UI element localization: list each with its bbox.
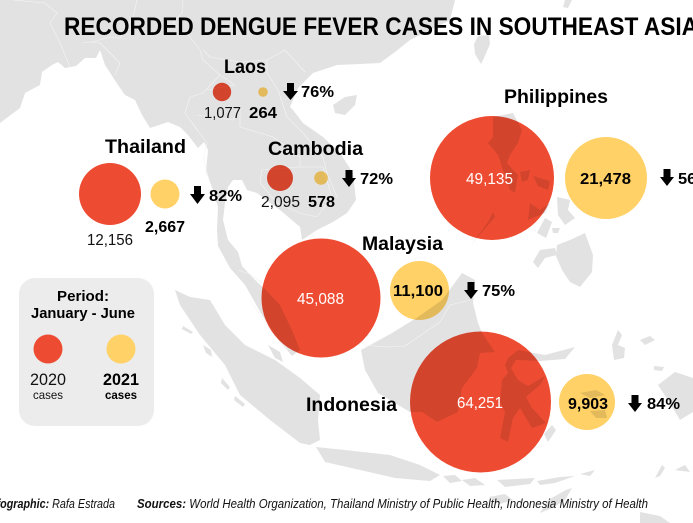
country: Thailand: 2,667 (145, 219, 185, 236)
panel: legend: 2021 (103, 371, 139, 389)
country: Malaysia: Malaysia (362, 233, 443, 255)
country: Thailand: 12,156 (87, 232, 133, 249)
country: Malaysia: 45,088 (297, 291, 344, 308)
panel: legend: cases (33, 388, 63, 402)
country: Philippines: 21,478 (580, 171, 631, 188)
country: Indonesia (306, 332, 680, 472)
country: Cambodia: 2,095 (261, 194, 300, 211)
country: Laos (204, 56, 334, 122)
country: Philippines: Philippines (504, 86, 608, 108)
country: Malaysia: 75% (482, 283, 515, 300)
country: Indonesia: Indonesia (306, 394, 397, 416)
panel: legend: cases (105, 388, 137, 402)
country: Thailand: Thailand (105, 136, 186, 158)
country: Philippines: 49,135 (466, 171, 513, 188)
footer credits: Sources: World Health Organization, Thailand Ministry of Public Health, Indonesia Ministry of Health (137, 497, 648, 511)
panel: legend (19, 278, 154, 426)
country: Thailand (79, 136, 242, 249)
country: Laos: Laos (224, 56, 266, 78)
country: Laos: 1,077 (204, 105, 241, 122)
country: Laos: 264 (249, 105, 277, 122)
country: Cambodia: Cambodia (268, 138, 363, 160)
panel: legend: 2020 (30, 371, 66, 389)
panel: legend: Period: (57, 289, 109, 305)
country: Cambodia (261, 138, 393, 211)
country: Indonesia: 9,903 (568, 396, 608, 413)
country: Malaysia: 11,100 (393, 283, 443, 300)
country: Cambodia: 72% (360, 171, 393, 188)
country: Philippines (430, 86, 693, 240)
country: Laos: 76% (301, 84, 334, 101)
country: Cambodia: 578 (308, 194, 335, 211)
country: Malaysia (262, 233, 515, 358)
country: Indonesia: 64,251 (457, 395, 503, 412)
country: Indonesia: 84% (647, 396, 680, 413)
panel: legend: January - June (31, 306, 135, 322)
country: Thailand: 82% (209, 188, 242, 205)
